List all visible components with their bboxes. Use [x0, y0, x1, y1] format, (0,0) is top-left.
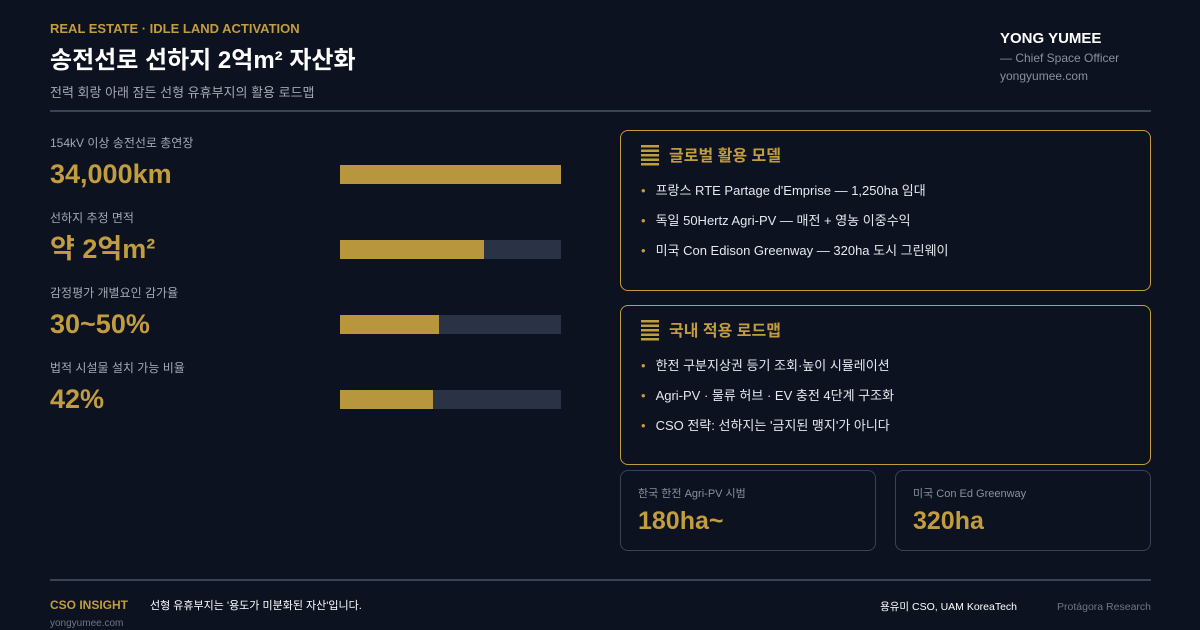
- author block: yongyumee.com: [1000, 69, 1088, 83]
- footer insight: CSO INSIGHT 선형 유휴부지는 '용도가 미분화된 자산'입니다.: [50, 598, 362, 612]
- list: CSO 전략: 선하지는 '금지된 맹지'가 아니다: [656, 418, 890, 433]
- metric 2: [50, 211, 155, 264]
- subtitle: 전력 회랑 아래 잠든 선형 유휴부지의 활용 로드맵: [50, 85, 314, 100]
- panel: domestic roadmap: [620, 305, 1151, 465]
- metric 2: 선하지 추정 면적: [50, 211, 134, 225]
- list: 프랑스 RTE Partage d'Emprise — 1,250ha 임대: [656, 183, 926, 198]
- stat card 1: 180ha~: [638, 507, 724, 535]
- metric 4: 42%: [50, 384, 104, 414]
- icon: [641, 320, 659, 342]
- metric 1: 34,000km: [50, 159, 172, 189]
- list: 독일 50Hertz Agri-PV — 매전 + 영농 이중수익: [656, 213, 911, 228]
- heading: 국내 적용 로드맵: [669, 323, 781, 340]
- metric 4: [50, 361, 185, 414]
- stat card 2: [895, 470, 1151, 551]
- metric 3: [50, 286, 178, 339]
- bar 1: [340, 165, 561, 184]
- metric 1: 154kV 이상 송전선로 총연장: [50, 136, 193, 150]
- metric 2: 약 2억m²: [50, 234, 155, 264]
- bar 4: [340, 390, 561, 409]
- footer insight: yongyumee.com: [50, 618, 123, 629]
- list: 미국 Con Edison Greenway — 320ha 도시 그린웨이: [656, 243, 949, 258]
- bar 2: [340, 240, 561, 259]
- list: Agri-PV · 물류 허브 · EV 충전 4단계 구조화: [656, 388, 894, 403]
- footer credits: 용유미 CSO, UAM KoreaTech Protágora Research: [880, 601, 1151, 613]
- list: [642, 183, 949, 258]
- footer insight: [50, 598, 362, 629]
- metric 3: 감정평가 개별요인 감가율: [50, 286, 178, 300]
- author block: — Chief Space Officer: [1000, 51, 1119, 65]
- list: [642, 358, 894, 433]
- icon: [641, 145, 659, 167]
- panel: global models: [620, 130, 1151, 291]
- author block: YONG YUMEE: [1000, 30, 1101, 47]
- stat card 1: 한국 한전 Agri-PV 시범: [638, 488, 746, 500]
- heading: 글로벌 활용 모델: [669, 148, 781, 165]
- list: 한전 구분지상권 등기 조회·높이 시뮬레이션: [656, 358, 890, 373]
- stat card 2: 320ha: [913, 507, 984, 535]
- bar 3: [340, 315, 561, 334]
- kicker: REAL ESTATE · IDLE LAND ACTIVATION: [50, 21, 300, 36]
- stat card 2: 미국 Con Ed Greenway: [913, 488, 1026, 500]
- metric 1: [50, 136, 193, 189]
- author block: [1000, 30, 1119, 83]
- title: 송전선로 선하지 2억m² 자산화: [50, 47, 356, 74]
- stat card 1: [620, 470, 876, 551]
- metric 4: 법적 시설물 설치 가능 비율: [50, 361, 185, 375]
- metric 3: 30~50%: [50, 309, 150, 339]
